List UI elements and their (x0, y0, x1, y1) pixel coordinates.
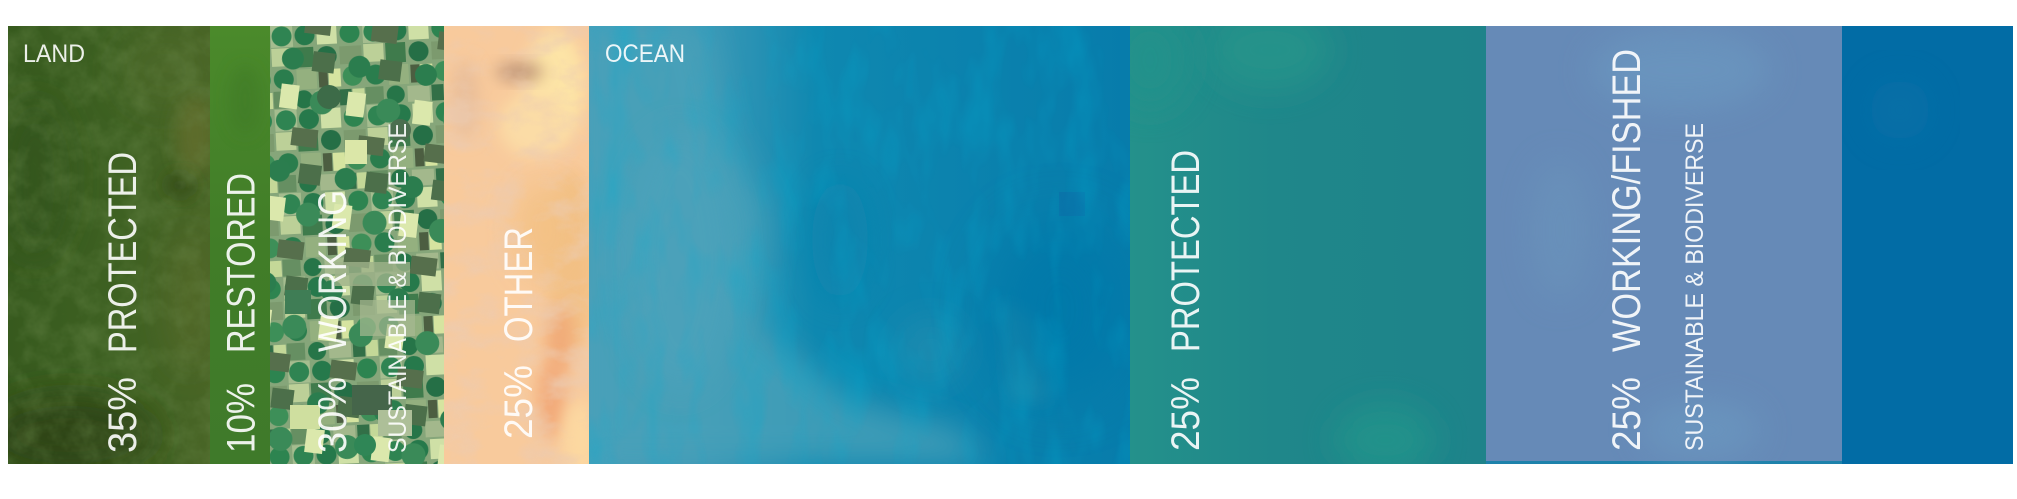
label: 25% working fished: WORKING/FISHED (1605, 49, 1649, 352)
label: 25% other (497, 227, 541, 439)
panel: ocean working fished (1486, 26, 1842, 464)
label: 10% restored (220, 173, 264, 453)
label: 35% protected: PROTECTED (101, 152, 145, 353)
label: 30% working: WORKING (311, 190, 355, 352)
panel: land protected forest (0, 26, 216, 475)
label: 35% protected (101, 152, 145, 453)
label: 25% ocean protected: 25% (1164, 377, 1208, 451)
panel: land restored (210, 26, 270, 464)
label: 30% working: 30% (311, 377, 355, 453)
label: 25% working fished (1605, 49, 1649, 451)
label: 30% working (311, 190, 355, 453)
label: 10% restored: 10% (220, 383, 264, 453)
label: 25% other: 25% (497, 365, 541, 439)
label: 35% protected: 35% (101, 377, 145, 453)
panel: land other desert (444, 26, 598, 480)
label: 10% restored: RESTORED (220, 173, 264, 353)
heading: ocean: OCEAN (605, 40, 685, 68)
label: ocean sustainable and biodiverse: SUSTAINABLE & BIODIVERSE (1681, 123, 1709, 451)
panel: ocean protected (1130, 26, 1486, 464)
label: 25% working fished: 25% (1605, 377, 1649, 451)
heading: land: LAND (23, 40, 85, 68)
label: 25% ocean protected: PROTECTED (1164, 150, 1208, 352)
label: 25% other: OTHER (497, 227, 541, 342)
panel: ocean open water (589, 26, 1130, 464)
panel: land working farm fields (270, 26, 444, 464)
label: 25% ocean protected (1164, 150, 1208, 451)
label: land sustainable and biodiverse: SUSTAINABLE & BIODIVERSE (384, 123, 412, 453)
panel: ocean remainder (1842, 26, 2013, 464)
